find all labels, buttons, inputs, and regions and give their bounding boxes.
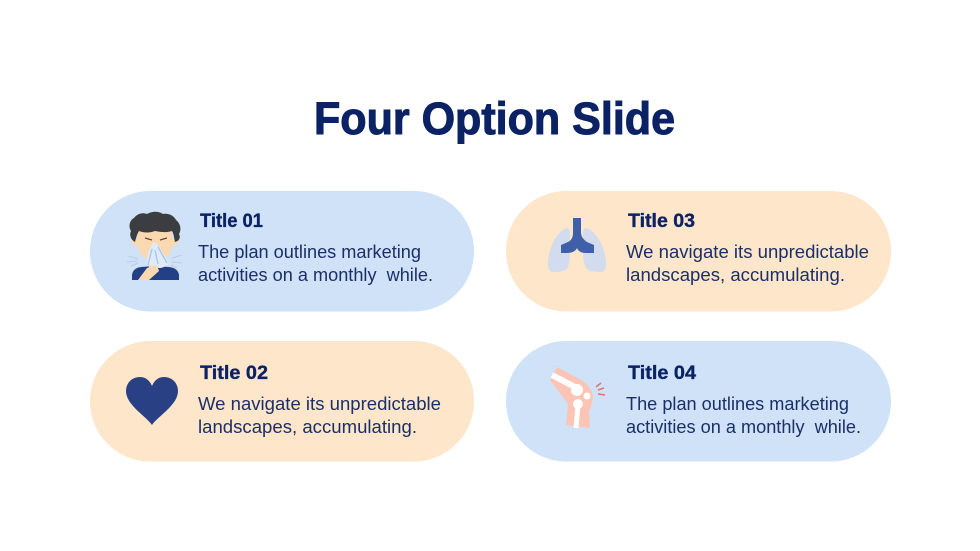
text: description 03: landscapes, accumulating.	[626, 265, 845, 285]
text: description 04: The plan outlines marketing	[626, 394, 849, 414]
icon: person sneezing	[127, 212, 182, 280]
text: description 03: We navigate its unpredictable	[626, 242, 869, 262]
text: description 04: activities on a monthly while.	[626, 417, 861, 437]
panel: option 04	[506, 341, 891, 462]
heading: title 02: Title 02	[200, 363, 268, 384]
panel: option 02	[90, 341, 474, 462]
text: description 01: activities on a monthly while.	[198, 265, 433, 285]
title: Four Option Slide	[314, 93, 675, 144]
heading: title 01: Title 01	[200, 211, 263, 232]
text: description 01: The plan outlines marketing	[198, 242, 421, 262]
icon: knee joint	[550, 367, 605, 428]
icon: heart	[126, 377, 178, 425]
text: description 02: landscapes, accumulating.	[198, 417, 417, 437]
heading: title 03: Title 03	[628, 211, 695, 232]
heading: title 04: Title 04	[628, 363, 696, 384]
text: description 02: We navigate its unpredictable	[198, 394, 441, 414]
icon: lungs	[548, 218, 606, 272]
panel: option 01	[90, 191, 474, 312]
panel: option 03	[506, 191, 891, 312]
